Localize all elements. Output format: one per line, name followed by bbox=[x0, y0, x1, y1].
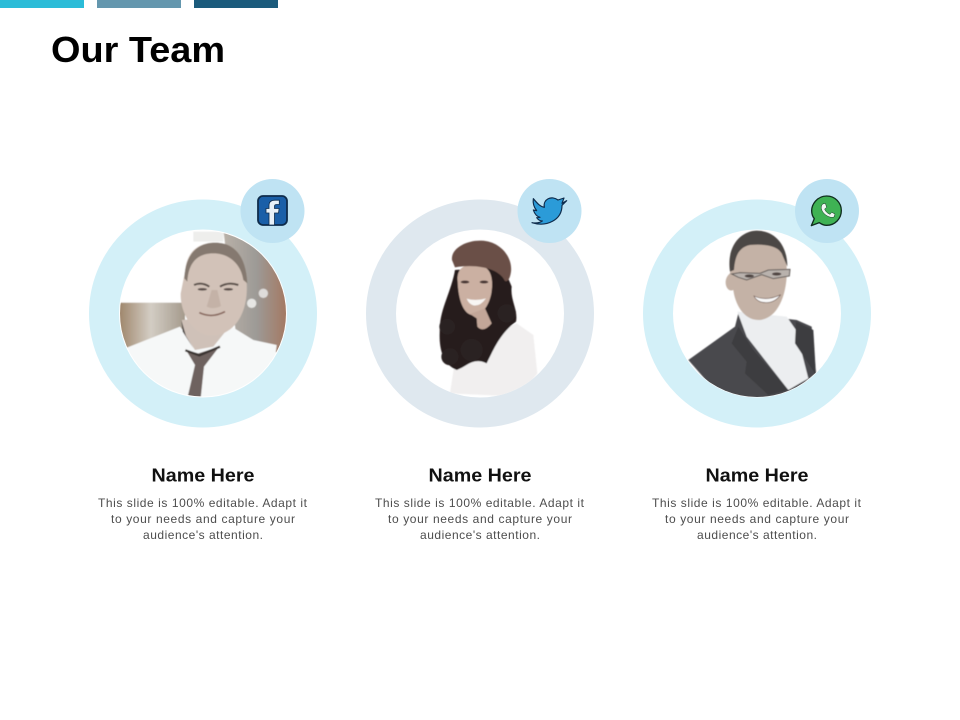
description three: This slide is 100% editable. Adapt it bbox=[652, 496, 862, 510]
name two: Name Here bbox=[428, 466, 532, 486]
panel: team member one bbox=[98, 179, 308, 542]
description three: audience's attention. bbox=[697, 528, 817, 542]
social badge: whatsapp bbox=[795, 179, 859, 243]
ring two bbox=[381, 214, 579, 412]
panel: team member two bbox=[375, 179, 585, 542]
description one: to your needs and capture your bbox=[111, 512, 295, 526]
accent bars bbox=[0, 0, 278, 8]
social badge: facebook bbox=[240, 179, 304, 243]
panel: team member three bbox=[652, 179, 862, 542]
description two: audience's attention. bbox=[420, 528, 540, 542]
ring three bbox=[658, 214, 856, 412]
photo: man in suit bbox=[688, 231, 816, 400]
title: Our Team bbox=[51, 29, 225, 70]
description one: This slide is 100% editable. Adapt it bbox=[98, 496, 308, 510]
name three: Name Here bbox=[706, 466, 808, 486]
description two: to your needs and capture your bbox=[388, 512, 572, 526]
photo: man with tie bbox=[117, 228, 290, 402]
description three: to your needs and capture your bbox=[665, 512, 849, 526]
description one: audience's attention. bbox=[143, 528, 263, 542]
description one bbox=[98, 496, 308, 542]
photo: woman with cap bbox=[439, 241, 537, 397]
description two bbox=[375, 496, 585, 542]
description two: This slide is 100% editable. Adapt it bbox=[375, 496, 585, 510]
description three bbox=[652, 496, 862, 542]
social badge: twitter bbox=[518, 179, 582, 243]
name one: Name Here bbox=[152, 466, 254, 486]
ring one bbox=[104, 214, 302, 412]
